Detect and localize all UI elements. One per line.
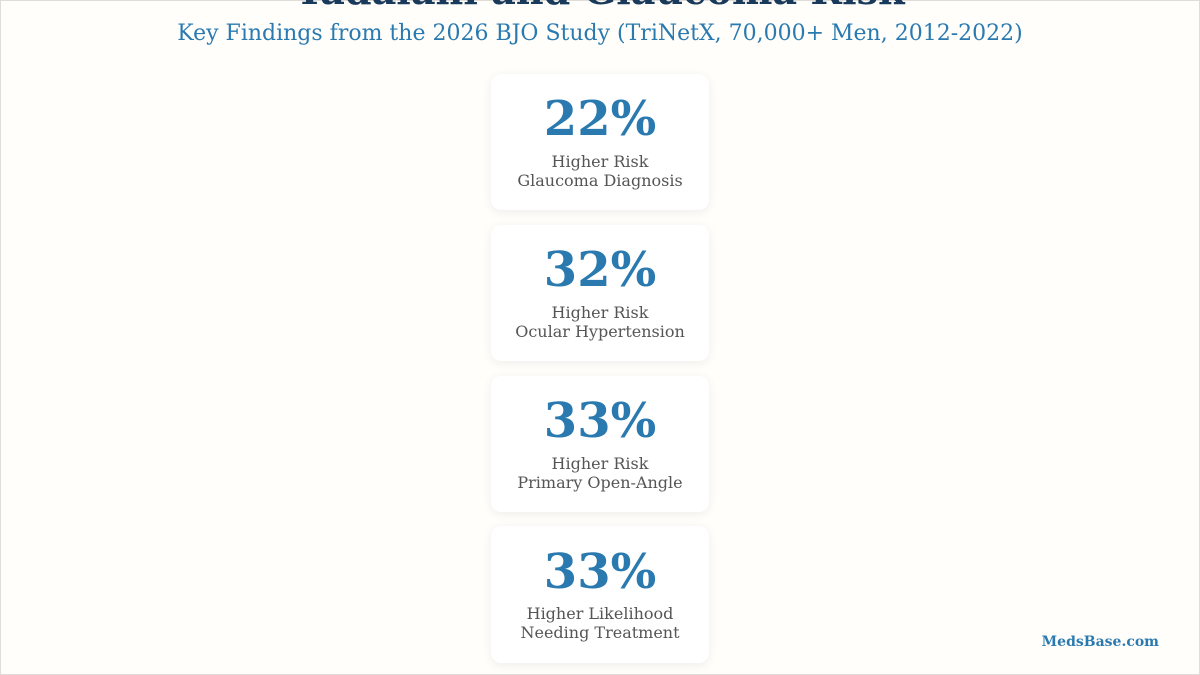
stat number: 32% [544, 242, 656, 298]
stat label: Ocular Hypertension [515, 322, 685, 341]
stat label: Higher Risk [552, 303, 648, 322]
stat number: 33% [544, 393, 656, 449]
stat label: Glaucoma Diagnosis [517, 171, 683, 190]
stat label: Higher Risk [552, 152, 648, 171]
stat label [520, 604, 680, 642]
stat label [515, 303, 685, 341]
stat label: Higher Likelihood [527, 604, 673, 623]
brand footer: MedsBase.com [1042, 634, 1159, 650]
stat label [517, 152, 683, 190]
panel: needing treatment stat [491, 526, 709, 663]
stat number: 22% [544, 91, 656, 147]
panel: primary open-angle stat [491, 376, 709, 512]
panel: ocular hypertension stat [491, 225, 709, 361]
stat label: Higher Risk [552, 454, 648, 473]
panel: glaucoma diagnosis stat [491, 74, 709, 210]
stat label: Primary Open-Angle [517, 473, 683, 492]
stat number: 33% [544, 544, 656, 600]
stat label [517, 454, 683, 492]
subtitle: Key Findings from the 2026 BJO Study (TriNetX, 70,000+ Men, 2012-2022) [177, 21, 1023, 46]
stat label: Needing Treatment [520, 623, 680, 642]
